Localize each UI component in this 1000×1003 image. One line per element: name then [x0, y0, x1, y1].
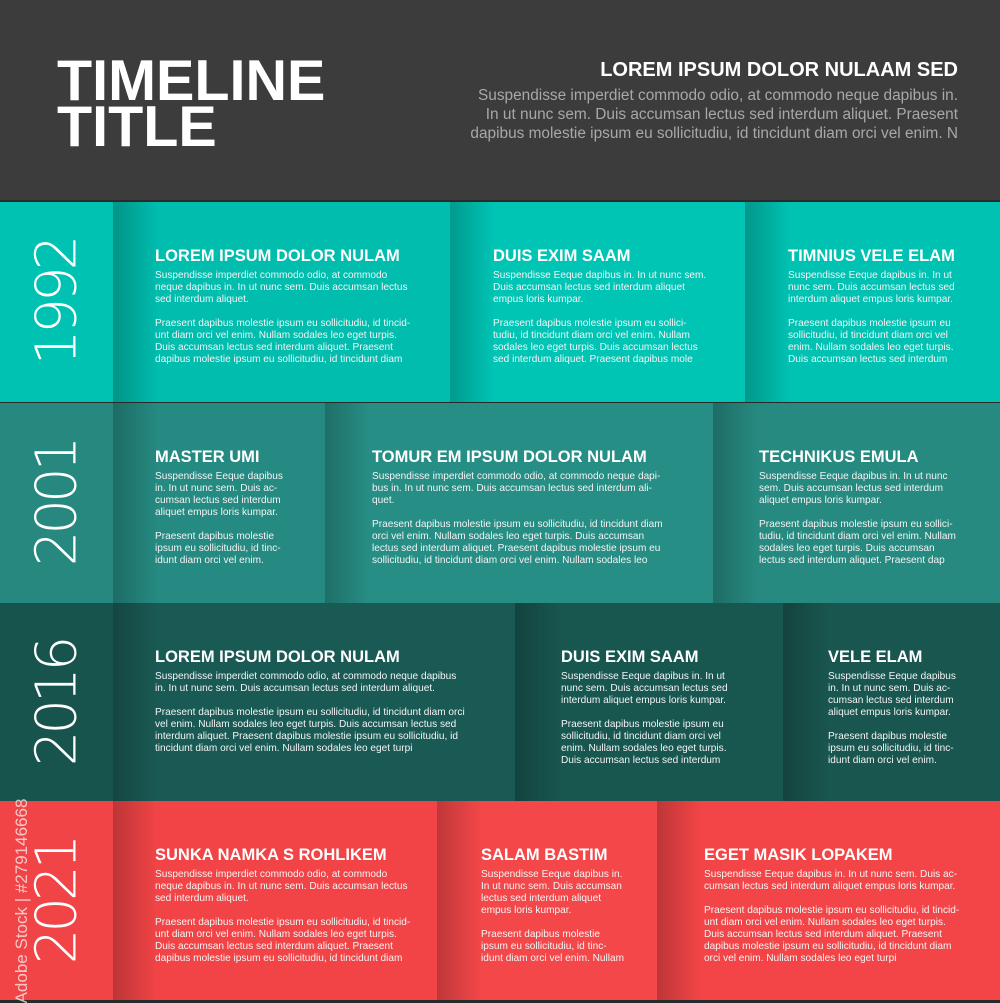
header: [0, 0, 1000, 200]
header subtitle block: In ut nunc sem. Duis accumsan lectus sed interdum aliquet. Praesent: [486, 106, 958, 123]
panel 2001 b: Praesent dapibus molestie ipsum eu sollicitudiu, id tincidunt diam: [372, 519, 663, 530]
panel 1992 c: nunc sem. Duis accumsan lectus sed: [788, 282, 955, 293]
panel 2001 c: sem. Duis accumsan lectus sed interdum: [759, 483, 943, 494]
panel 1992 a: Praesent dapibus molestie ipsum eu sollicitudiu, id tincid-: [155, 318, 410, 329]
panel 1992 a: sed interdum aliquet.: [155, 294, 249, 305]
panel 2021 b: SALAM BASTIM: [481, 846, 608, 864]
panel 2021 c: dapibus molestie ipsum eu sollicitudiu, id tincidunt diam: [704, 941, 951, 952]
panel 2021 b: In ut nunc sem. Duis accumsan: [481, 881, 622, 892]
panel 1992 c: sollicitudiu, id tincidunt diam orci vel: [788, 330, 948, 341]
panel 2001 b: [325, 403, 713, 603]
panel 2021 c: Duis accumsan lectus sed interdum aliquet. Praesent: [704, 929, 942, 940]
panel 1992 c: Suspendisse Eeque dapibus in. In ut: [788, 270, 952, 281]
panel 2016 b: [515, 603, 783, 801]
panel 1992 a: [113, 202, 450, 402]
year 1992: [0, 202, 113, 402]
panel 1992 a: LOREM IPSUM DOLOR NULAM: [155, 247, 400, 265]
panel 2001 c: TECHNIKUS EMULA: [759, 448, 918, 466]
panel 2016 a: [113, 603, 515, 801]
panel 2001 a: MASTER UMI: [155, 448, 260, 466]
panel 2016 b: nunc sem. Duis accumsan lectus sed: [561, 683, 728, 694]
panel 2001 c: Suspendisse Eeque dapibus in. In ut nunc: [759, 471, 948, 482]
panel 2001 c: aliquet empus loris kumpar.: [759, 495, 882, 506]
panel 2016 b: Duis accumsan lectus sed interdum: [561, 755, 720, 766]
panel 2016 b: interdum aliquet empus loris kumpar.: [561, 695, 726, 706]
panel 1992 c: interdum aliquet empus loris kumpar.: [788, 294, 953, 305]
panel 2016 a: vel enim. Nullam sodales leo eget turpis. Duis accumsan lectus sed: [155, 719, 456, 730]
panel 2016 c: cumsan lectus sed interdum: [828, 695, 954, 706]
panel 1992 b: [450, 202, 745, 402]
panel 2021 b: empus loris kumpar.: [481, 905, 571, 916]
title: [57, 49, 325, 159]
panel 2021 a: sed interdum aliquet.: [155, 893, 249, 904]
panel 2001 c: lectus sed interdum aliquet. Praesent dap: [759, 555, 945, 566]
year 2001: [0, 403, 113, 603]
header subtitle block: Suspendisse imperdiet commodo odio, at commodo neque dapibus in.: [478, 87, 958, 104]
panel 2016 b: Praesent dapibus molestie ipsum eu: [561, 719, 724, 730]
panel 2001 a: cumsan lectus sed interdum: [155, 495, 281, 506]
title: TIMELINE: [57, 49, 325, 113]
panel 2021 b: lectus sed interdum aliquet: [481, 893, 601, 904]
panel 1992 b: Suspendisse Eeque dapibus in. In ut nunc sem.: [493, 270, 706, 281]
panel 2021 c: orci vel enim. Nullam sodales leo eget turpi: [704, 953, 896, 964]
panel 1992 c: Praesent dapibus molestie ipsum eu: [788, 318, 951, 329]
row 2001: [0, 403, 1000, 603]
panel 2016 c: Praesent dapibus molestie: [828, 731, 947, 742]
panel 2016 a: tincidunt diam orci vel enim. Nullam sodales leo eget turpi: [155, 743, 413, 754]
panel 1992 b: DUIS EXIM SAAM: [493, 247, 631, 265]
panel 2016 a: in. In ut nunc sem. Duis accumsan lectus sed interdum aliquet.: [155, 683, 435, 694]
panel 2021 a: [113, 801, 437, 1000]
panel 2016 c: idunt diam orci vel enim.: [828, 755, 937, 766]
panel 2021 a: Duis accumsan lectus sed interdum aliquet. Praesent: [155, 941, 393, 952]
panel 1992 a: dapibus molestie ipsum eu sollicitudiu, id tincidunt diam: [155, 354, 402, 365]
panel 2001 b: quet.: [372, 495, 394, 506]
panel 1992 c: TIMNIUS VELE ELAM: [788, 247, 955, 265]
year 2021: [0, 801, 113, 1000]
panel 1992 a: unt diam orci vel enim. Nullam sodales leo eget turpis.: [155, 330, 397, 341]
panel 2021 c: EGET MASIK LOPAKEM: [704, 846, 893, 864]
panel 2001 b: Suspendisse imperdiet commodo odio, at commodo neque dapi-: [372, 471, 660, 482]
panel 2021 b: Praesent dapibus molestie: [481, 929, 600, 940]
panel 2021 b: idunt diam orci vel enim. Nullam: [481, 953, 624, 964]
panel 2016 a: interdum aliquet. Praesent dapibus molestie ipsum eu sollicitudiu, id: [155, 731, 458, 742]
year 2001: 2001: [24, 440, 90, 566]
panel 2016 b: enim. Nullam sodales leo eget turpis.: [561, 743, 727, 754]
panel 1992 a: neque dapibus in. In ut nunc sem. Duis accumsan lectus: [155, 282, 408, 293]
panel 2001 c: sodales leo eget turpis. Duis accumsan: [759, 543, 935, 554]
panel 2021 a: Suspendisse imperdiet commodo odio, at commodo: [155, 869, 387, 880]
panel 1992 b: empus loris kumpar.: [493, 294, 583, 305]
panel 2001 c: tudiu, id tincidunt diam orci vel enim. Nullam: [759, 531, 956, 542]
panel 2001 a: aliquet empus loris kumpar.: [155, 507, 278, 518]
panel 2021 c: Suspendisse Eeque dapibus in. In ut nunc sem. Duis ac-: [704, 869, 957, 880]
panel 2001 b: orci vel enim. Nullam sodales leo eget turpis. Duis accumsan: [372, 531, 644, 542]
panel 2016 c: aliquet empus loris kumpar.: [828, 707, 951, 718]
panel 2016 a: Suspendisse imperdiet commodo odio, at commodo neque dapibus: [155, 671, 456, 682]
panel 2016 a: LOREM IPSUM DOLOR NULAM: [155, 648, 400, 666]
panel 2001 a: [113, 403, 325, 603]
panel 2016 a: Praesent dapibus molestie ipsum eu sollicitudiu, id tincidunt diam orci: [155, 707, 465, 718]
panel 2021 a: Praesent dapibus molestie ipsum eu sollicitudiu, id tincid-: [155, 917, 410, 928]
panel 2001 a: ipsum eu sollicitudiu, id tinc-: [155, 543, 281, 554]
panel 2021 a: dapibus molestie ipsum eu sollicitudiu, id tincidunt diam: [155, 953, 402, 964]
title: TITLE: [57, 95, 217, 159]
year 1992: 1992: [24, 239, 90, 365]
watermark text: Adobe Stock | #279146668: [12, 799, 31, 1003]
panel 2021 b: [437, 801, 657, 1000]
row 1992: [0, 202, 1000, 402]
panel 2021 c: unt diam orci vel enim. Nullam sodales leo eget turpis.: [704, 917, 946, 928]
panel 1992 b: sed interdum aliquet. Praesent dapibus mole: [493, 354, 693, 365]
panel 1992 c: enim. Nullam sodales leo eget turpis.: [788, 342, 954, 353]
panel 2016 c: ipsum eu sollicitudiu, id tinc-: [828, 743, 954, 754]
panel 2021 a: unt diam orci vel enim. Nullam sodales leo eget turpis.: [155, 929, 397, 940]
panel 1992 b: sodales leo eget turpis. Duis accumsan lectus: [493, 342, 698, 353]
panel 2001 a: Suspendisse Eeque dapibus: [155, 471, 283, 482]
panel 2021 b: Suspendisse Eeque dapibus in.: [481, 869, 622, 880]
header subtitle block: [470, 59, 958, 142]
row 2021: [0, 801, 1000, 1000]
panel 2016 b: DUIS EXIM SAAM: [561, 648, 699, 666]
panel 2016 c: [783, 603, 1000, 801]
panel 2021 a: neque dapibus in. In ut nunc sem. Duis accumsan lectus: [155, 881, 408, 892]
panel 2001 b: TOMUR EM IPSUM DOLOR NULAM: [372, 448, 647, 466]
panel 2001 b: lectus sed interdum aliquet. Praesent dapibus molestie ipsum eu: [372, 543, 660, 554]
year 2016: 2016: [24, 640, 90, 766]
panel 2016 c: Suspendisse Eeque dapibus: [828, 671, 956, 682]
panel 2016 c: in. In ut nunc sem. Duis ac-: [828, 683, 950, 694]
panel 2001 c: Praesent dapibus molestie ipsum eu sollici-: [759, 519, 953, 530]
panel 2001 a: Praesent dapibus molestie: [155, 531, 274, 542]
panel 2001 b: bus in. In ut nunc sem. Duis accumsan lectus sed interdum ali-: [372, 483, 652, 494]
panel 1992 b: Praesent dapibus molestie ipsum eu sollici-: [493, 318, 687, 329]
panel 2001 a: idunt diam orci vel enim.: [155, 555, 264, 566]
panel 2021 c: [657, 801, 1000, 1000]
year 2021: 2021: [24, 838, 90, 964]
panel 1992 b: tudiu, id tincidunt diam orci vel enim. Nullam: [493, 330, 690, 341]
panel 2001 c: [713, 403, 1000, 603]
panel 1992 c: Duis accumsan lectus sed interdum: [788, 354, 947, 365]
panel 2016 c: VELE ELAM: [828, 648, 922, 666]
header subtitle block: LOREM IPSUM DOLOR NULAAM SED: [600, 59, 958, 81]
panel 2021 b: ipsum eu sollicitudiu, id tinc-: [481, 941, 607, 952]
panel 2001 b: sollicitudiu, id tincidunt diam orci vel enim. Nullam sodales leo: [372, 555, 647, 566]
panel 1992 a: Suspendisse imperdiet commodo odio, at commodo: [155, 270, 387, 281]
year 2016: [0, 603, 113, 801]
panel 1992 a: Duis accumsan lectus sed interdum aliquet. Praesent: [155, 342, 393, 353]
panel 2021 a: SUNKA NAMKA S ROHLIKEM: [155, 846, 387, 864]
panel 2021 c: Praesent dapibus molestie ipsum eu sollicitudiu, id tincid-: [704, 905, 959, 916]
panel 2021 c: cumsan lectus sed interdum aliquet empus loris kumpar.: [704, 881, 955, 892]
panel 2001 a: in. In ut nunc sem. Duis ac-: [155, 483, 277, 494]
header subtitle block: dapibus molestie ipsum eu sollicitudiu, id tincidunt diam orci vel enim. N: [470, 125, 958, 142]
panel 1992 b: Duis accumsan lectus sed interdum aliquet: [493, 282, 685, 293]
row 2016: [0, 603, 1000, 801]
panel 1992 c: [745, 202, 1000, 402]
panel 2016 b: Suspendisse Eeque dapibus in. In ut: [561, 671, 725, 682]
panel 2016 b: sollicitudiu, id tincidunt diam orci vel: [561, 731, 721, 742]
